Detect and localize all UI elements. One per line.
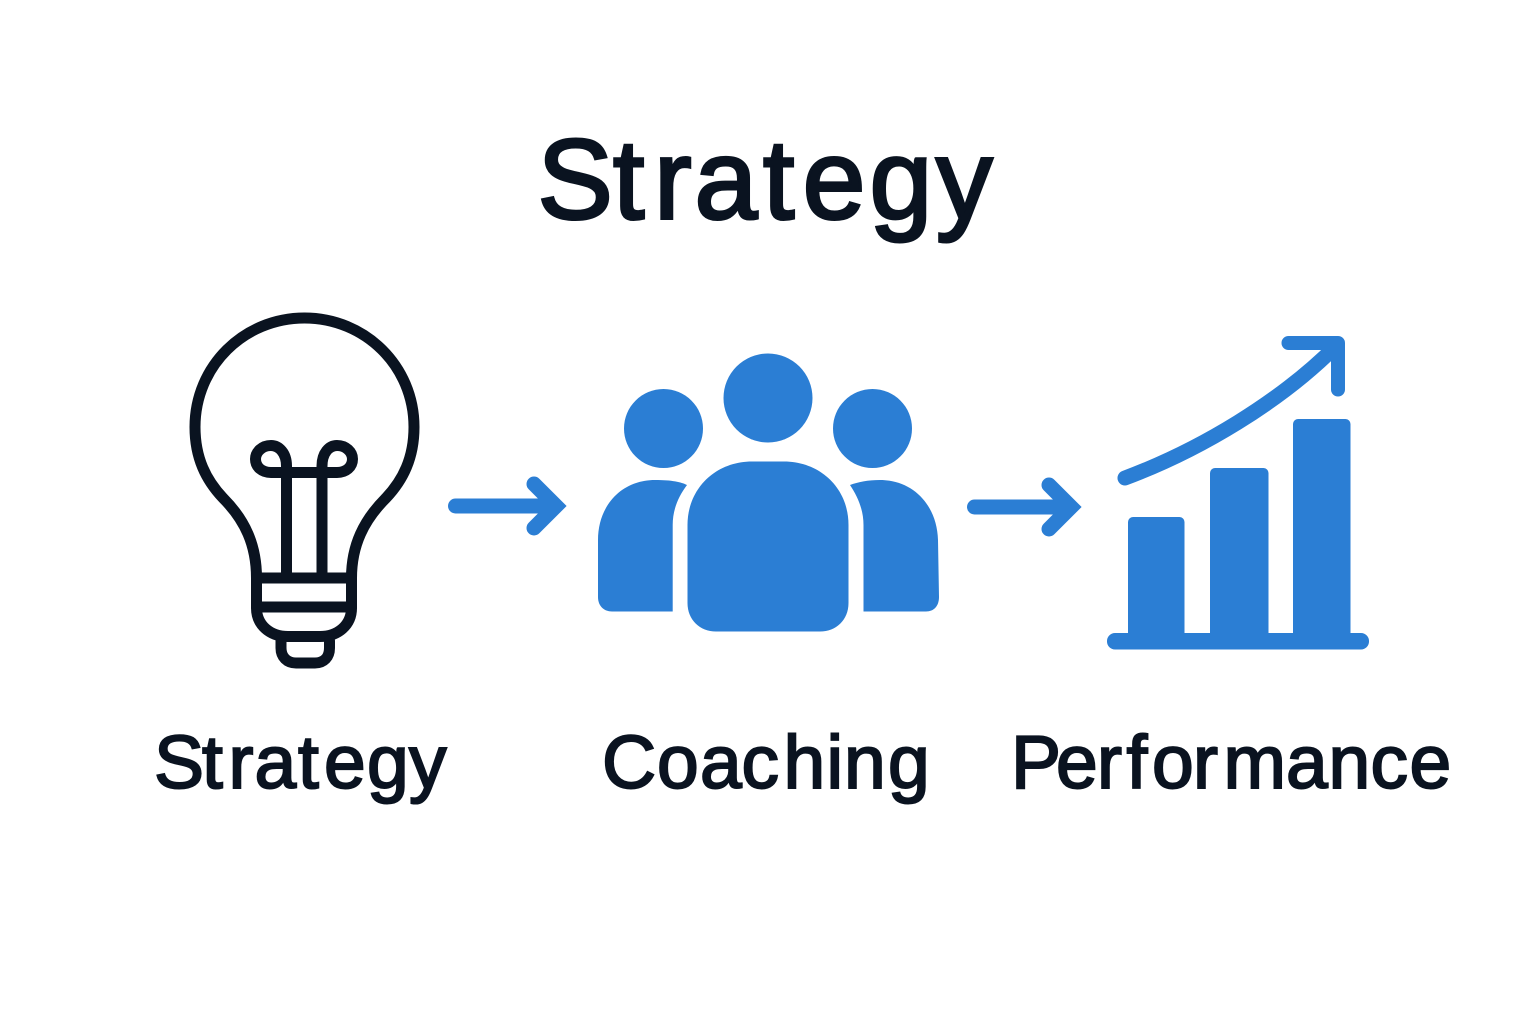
label: performance: Performance (1011, 720, 1451, 804)
bar 3 (1293, 419, 1350, 642)
icon: team (598, 354, 939, 632)
arrow: strategy to coaching (456, 484, 556, 528)
bar 2 (1210, 468, 1268, 642)
label: strategy: Strategy (154, 720, 447, 804)
baseline (1107, 633, 1369, 650)
icon: light bulb (195, 318, 414, 663)
icon: growth chart (1107, 343, 1369, 650)
arrow: coaching to performance (974, 485, 1071, 529)
trend arrow (1125, 343, 1338, 478)
label: coaching: Coaching (602, 720, 930, 804)
title: Strategy (538, 116, 993, 242)
bar 1 (1128, 517, 1184, 642)
